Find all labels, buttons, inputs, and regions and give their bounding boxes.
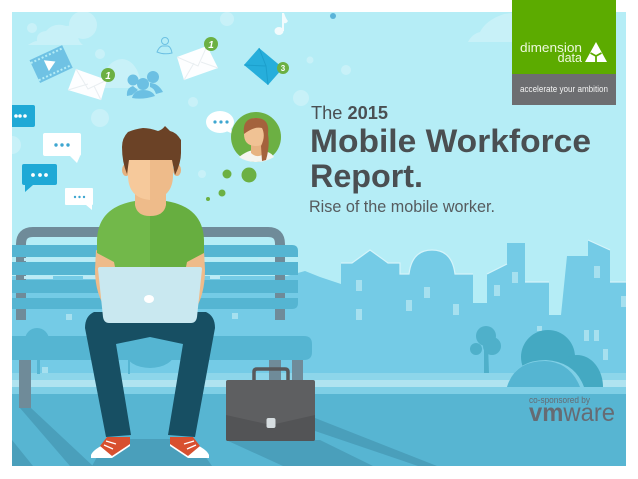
- person: [85, 126, 215, 458]
- icon: blue envelope: 3: [281, 64, 286, 73]
- bench backrest slats: [12, 245, 298, 309]
- bench legs: [19, 360, 303, 408]
- icon: group of people: [127, 71, 163, 99]
- speech bubble blue one: [12, 105, 35, 127]
- bushes: [507, 330, 603, 387]
- bench seat: [12, 336, 312, 360]
- arms: [95, 250, 205, 312]
- decorative background circles: [3, 11, 351, 178]
- icon: envelope one: [68, 68, 115, 100]
- tree between legs: [128, 360, 172, 374]
- cloud top right: [468, 13, 512, 42]
- heading: the 2015: The 2015: [311, 103, 388, 123]
- neck: [135, 190, 166, 216]
- briefcase: [226, 369, 315, 441]
- logo: dimension data: [512, 0, 616, 105]
- skyline highlight: [341, 240, 626, 282]
- cloud behind envelope: [104, 59, 140, 88]
- bench frame: [21, 232, 280, 320]
- icon: small person outline: [157, 38, 172, 54]
- speech bubble white two: [65, 188, 93, 210]
- speech bubble blue two: [22, 164, 57, 192]
- face: [128, 155, 150, 200]
- logo: vmware co-sponsor: vmware: [529, 399, 615, 427]
- heading: report: Report.: [310, 158, 423, 194]
- subheading: Rise of the mobile worker.: [309, 198, 495, 216]
- logo: vmware co-sponsor: co-sponsored by: [529, 395, 590, 405]
- icon: music note: [274, 13, 288, 35]
- tree left behind bench: [25, 328, 49, 374]
- laptop: [98, 267, 202, 323]
- bench slat highlights: [24, 258, 220, 279]
- icon: film strip: [30, 45, 73, 83]
- face right side: [150, 155, 173, 200]
- tree small: [470, 326, 501, 373]
- icon: envelope one: 1: [105, 71, 111, 82]
- cloud left: [28, 25, 83, 45]
- ears: [122, 164, 181, 176]
- shirt right side: [150, 201, 204, 267]
- logo: dimension data: dimension: [520, 41, 582, 55]
- shoes: [91, 437, 209, 458]
- city skyline: [12, 240, 626, 380]
- logo: dimension data: accelerate your ambition: [520, 84, 608, 94]
- building windows: [42, 266, 626, 373]
- logo: dimension data: data: [558, 51, 582, 65]
- icon: envelope two: 1: [208, 40, 214, 51]
- avatar: woman in speech bubble: [206, 111, 281, 162]
- hair: [122, 126, 181, 175]
- speech bubble white one: [43, 133, 81, 163]
- green thought dots: [206, 168, 256, 201]
- trousers: [85, 312, 215, 437]
- heading: mobile workforce: Mobile Workforce: [310, 123, 591, 159]
- icon: envelope two: [177, 37, 218, 80]
- icon: blue envelope: [244, 48, 289, 85]
- shirt: [97, 201, 150, 267]
- ground stripes: [12, 373, 626, 466]
- shadows on ground: [12, 408, 437, 466]
